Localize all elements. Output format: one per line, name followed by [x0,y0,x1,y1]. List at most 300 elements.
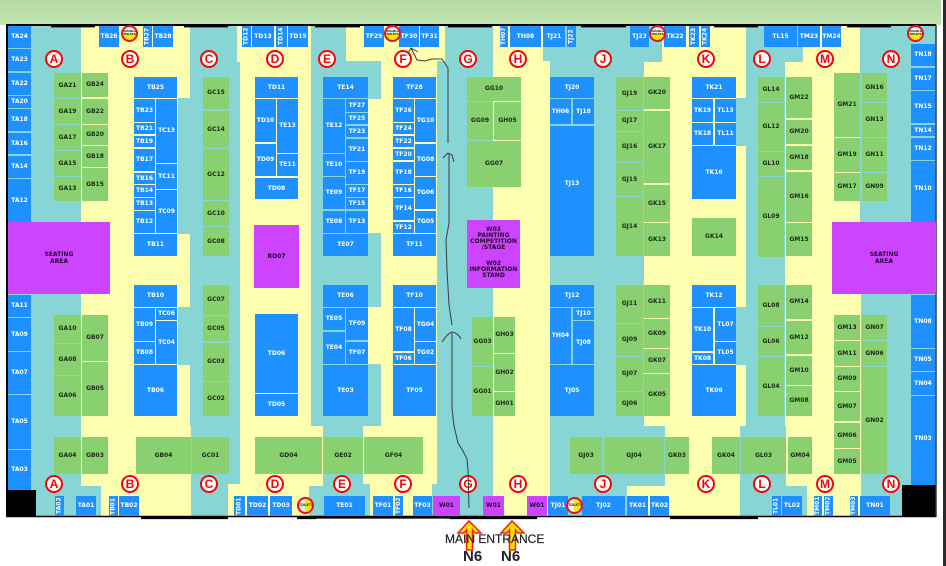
booth W03 W02 stage and information stand: INFORMATION [470,266,517,272]
zone F booths [364,26,439,474]
booth TN10 [911,161,935,222]
booth TJ22 [567,26,576,47]
marker L: L [758,52,766,66]
booth GG07 [467,141,521,187]
booth GB04: GB04 [155,452,172,458]
booth GL04 [758,357,784,416]
booth TB17: TB17 [136,156,153,163]
marker L [753,475,771,493]
booth GC01: GC01 [202,452,219,458]
booth TA11 [8,295,31,317]
booth TK19 [692,99,713,122]
booth GM04 [788,437,812,474]
booth W03 W02 stage and information stand: PAINTING [477,232,510,238]
booth GA21: GA21 [59,82,76,88]
booth GN11: GN11 [865,151,884,158]
booth GJ19: GJ19 [622,90,637,96]
booth GC07 [203,285,229,315]
booth TE03 [323,365,368,416]
booth GK04: GK04 [717,452,735,458]
booth TF25: TF25 [349,114,365,122]
booth TK24: TK24 [702,28,708,45]
booth TD10 [255,99,276,142]
marker D [266,50,284,68]
booth GB05: GB05 [86,385,104,392]
booth GJ19 [616,77,643,110]
booth GC14 [203,111,229,148]
booth TK02: TK02 [651,502,668,509]
booth TG05: TG05 [417,218,434,225]
booth TK18 [692,123,713,145]
booth TN14 [911,125,935,136]
booth GD04 [255,437,322,474]
marker G: G [463,52,473,66]
booth GB07 [82,315,108,361]
booth TF14: TF14 [395,205,412,212]
booth TA02: TA02 [56,498,62,514]
booth GL12: GL12 [762,123,780,130]
booth TA05 [8,395,31,449]
marker G [459,475,477,493]
booth TD11: TD11 [268,84,285,90]
booth TD15: TD15 [289,32,307,40]
booth TL11: TL11 [717,130,734,137]
booth GM16: GM16 [789,193,809,200]
booth TF20: TF20 [395,150,412,158]
booth GJ07 [616,357,643,391]
aisle letter markers top row [45,50,900,68]
marker N: N [887,52,895,66]
booth TE14: TE14 [337,84,354,90]
booth GN06: GN06 [865,350,884,356]
booth TJ10: TJ10 [576,310,591,317]
booth TN03: TN03 [914,434,932,442]
booth TB02: TB02 [120,502,138,509]
booth TF24 [393,123,414,134]
booth GH02: GH02 [495,368,514,376]
booth TA02 [55,496,64,516]
booth TK08 [692,353,713,364]
booth TJ23: TJ23 [632,32,647,40]
booth GB20 [82,125,108,145]
booth TF08 [393,308,414,351]
booth W03 W02 stage and information stand: /STAGE [482,244,505,250]
booth GH02 [494,354,515,391]
booth TE13: TE13 [279,122,296,129]
booth GL09 [758,177,784,257]
booth TN03 [911,396,935,485]
booth GM11: GM11 [837,350,857,356]
booth GG03: GG03 [473,338,492,344]
marker A: A [50,52,58,66]
toilet icon top F [384,25,401,42]
booth TF23 [346,126,368,137]
booth GG07: GG07 [485,160,503,167]
booth GA10 [54,315,81,343]
booth TG08: TG08 [417,156,434,163]
booth TA05: TA05 [11,418,28,425]
booth TD05: TD05 [268,401,285,408]
booth TA07: TA07 [11,369,28,376]
booth TD02: TD02 [249,502,266,509]
booth GH05 [494,102,521,140]
booth TF19 [346,162,368,184]
booth GM15: GM15 [789,236,809,242]
booth TK23 [689,26,699,47]
booth TB01: TB01 [110,498,116,515]
booth TE09: TE09 [326,189,342,196]
booth TF02: TF02 [395,498,402,514]
booth GM14: GM14 [789,298,809,305]
booth GE02 [323,437,363,474]
booth TN08: TN08 [914,318,932,324]
booth TD01: TD01 [236,497,242,515]
marker K: K [702,52,710,66]
booth TF30 [399,26,419,47]
booth TC11 [156,164,177,189]
marker F: F [399,52,407,66]
booth GA06 [54,376,81,416]
booth GM08 [786,386,812,416]
toilet icon bottom D: TOILETS [299,502,313,506]
booth TB11: TB11 [147,241,164,248]
booth TB16 [134,173,155,184]
booth GB03: GB03 [86,452,104,458]
aisle letter markers bottom row [45,475,900,493]
booth GC15: GC15 [207,89,225,96]
booth TF07 [346,342,368,364]
booth TK01 [627,496,648,516]
booth TJ22: TJ22 [568,29,574,44]
booth TG05 [415,211,436,233]
booth TB06: TB06 [147,386,164,394]
booth GM22 [786,77,812,118]
top wall booths H and J [500,26,576,47]
booth TH06: TH06 [552,108,569,114]
booth TA12: TA12 [11,196,28,204]
booth GM12: GM12 [789,334,809,340]
booth TA01: TA01 [78,502,94,509]
booth TA16: TA16 [11,140,28,146]
booth TA20: TA20 [11,98,28,105]
booth GM13: GM13 [837,324,857,330]
booth TD11 [255,77,298,98]
booth TK22: TK22 [666,32,684,40]
booth TB25 [134,77,177,98]
toilet icon bottom J [566,497,583,514]
booth TE10: TE10 [326,161,342,168]
booth TH04 [550,308,571,364]
booth GM13 [834,315,860,340]
booth TF28 [393,77,436,98]
marker A [45,50,63,68]
booth GN16 [862,73,887,102]
booth TM24 [822,26,841,47]
marker F [394,475,412,493]
booth TF27: TF27 [349,102,365,108]
zone G and H booths [467,77,521,416]
booth TC09: TC09 [158,208,175,214]
marker A: A [50,477,58,491]
booth GK14 [692,218,736,256]
booth W01 one [433,496,460,516]
booth TF09 [346,308,368,340]
booth TM24: TM24 [822,32,841,40]
booth GJ15: GJ15 [622,176,637,182]
booth TF26: TF26 [395,106,412,114]
booth TF21 [346,139,368,161]
booth TA18: TA18 [11,116,28,123]
booth TF12 [393,222,414,233]
booth W01 three: W01 [530,502,544,509]
booth TF08: TF08 [395,326,412,332]
booth TD06 [255,314,298,393]
booth TN12 [911,138,935,160]
zone K booths [664,26,736,416]
marker H: H [514,477,522,491]
booth TK06 [692,365,736,416]
booth GA15 [54,151,81,176]
booth TK01: TK01 [629,502,646,509]
booth GC10 [203,201,229,226]
booth TB26 [99,26,119,47]
booth W03 W02 stage and information stand: COMPETITION [470,238,517,244]
booth TB10: TB10 [147,292,164,299]
booth GJ11 [616,285,643,323]
booth TA12 [8,179,31,222]
booth GA19 [54,99,81,124]
seating area right: SEATING [870,250,898,258]
booth TB27: TB27 [144,28,150,45]
booth GH03 [494,317,515,353]
booth TF31 [420,26,439,47]
seating area left: SEATING [45,250,73,258]
booth TA16 [8,133,31,154]
booth GG03 [472,317,493,366]
booth TE11 [277,154,298,176]
booth TJ12: TJ12 [565,292,579,299]
booth GM21 [834,73,860,137]
booth TB06 [134,365,177,416]
booth GM05: GM05 [837,458,857,464]
booth TJ05: TJ05 [565,386,579,394]
booth GL10 [758,152,784,176]
booth GJ16: GJ16 [622,143,637,150]
booth GJ06: GJ06 [622,400,637,407]
booth TB12 [134,211,155,233]
booth TB16: TB16 [136,174,153,182]
booth TJ18 [573,99,594,124]
booth TD14: TD14 [278,28,284,45]
booth GK09: GK09 [648,330,666,336]
marker N [882,50,900,68]
marker N: N [887,477,895,491]
booth TF03 [413,496,432,516]
booth GK04 [712,437,740,474]
booth GN13: GN13 [865,116,884,123]
booth TA03 [8,450,31,490]
marker C [200,475,218,493]
booth GM06: GM06 [837,432,857,438]
zone M booths [786,26,860,474]
booth TF05 [393,365,436,416]
booth TF16 [393,185,414,197]
booth GK13 [644,223,670,256]
booth TJ21 [543,26,565,47]
booth TC04: TC04 [158,338,175,346]
booth GK15: GK15 [648,200,666,206]
booth TK16: TK16 [705,168,723,176]
marker K [697,475,715,493]
booth GK17: GK17 [648,143,666,150]
booth GM10 [786,356,812,385]
booth GB03 [82,437,108,474]
booth TL01: TL01 [772,498,780,514]
booth GM22: GM22 [789,94,809,100]
booth TK19: TK19 [694,106,711,114]
booth GL08 [758,285,784,326]
booth GK07: GK07 [648,357,666,364]
booth GJ03: GJ03 [578,452,594,458]
booth GM15 [786,223,812,256]
booth TL01 [772,496,781,516]
booth GK17 [644,111,670,183]
booth TJ23 [630,26,649,47]
booth GM20 [786,120,812,144]
booth GL08: GL08 [762,302,780,308]
booth GC12: GC12 [207,170,225,178]
marker C: C [205,477,213,491]
booth GG10 [467,77,521,101]
booth TE13 [277,99,298,153]
booth GM12 [786,321,812,354]
booth TE12: TE12 [326,122,342,129]
background: green sky band [0,0,941,25]
booth TA23: TA23 [11,56,28,63]
booth W01 two: W01 [486,502,501,509]
booth GK11 [644,285,670,318]
booth GA08 [54,344,81,375]
booth GB15: GB15 [86,180,104,188]
marker B: B [126,52,134,66]
zone L booths [758,26,820,416]
booth TD15 [288,26,308,47]
booth GB24: GB24 [86,81,104,88]
booth TE05 [323,308,345,330]
booth TF06 [393,353,414,364]
booth TK21: TK21 [705,84,723,90]
booth TB28: TB28 [154,32,172,40]
booth TF18 [393,162,414,184]
booth TB01 [109,496,118,516]
toilet icon top B [121,25,138,42]
booth GM05 [834,449,860,474]
booth TF21: TF21 [349,146,365,153]
booth GC02: GC02 [207,395,225,402]
booth TB12: TB12 [136,218,153,225]
bottom row green booths J K L [570,437,786,474]
booth GG09 [467,102,493,140]
booth TG06: TG06 [417,189,434,196]
zone B and C booths [99,26,229,474]
booth W01 two [483,496,504,516]
booth GL09: GL09 [762,213,780,220]
zone J booths [550,26,670,416]
booth GA17 [54,125,81,150]
booth GK07 [644,349,670,373]
booth GC01 [192,437,229,474]
booth GC03: GC03 [207,358,225,365]
booth TE07 [323,234,368,256]
booth GC03 [203,343,229,381]
seating area left [8,222,110,294]
booth GM06 [834,423,860,448]
booth GM08: GM08 [789,397,809,404]
booth TN17: TN17 [914,75,932,82]
booth TL05: TL05 [717,349,734,356]
booth TE03: TE03 [337,386,354,394]
booth GN13 [862,103,887,137]
booth TA22: TA22 [11,80,28,87]
booth TN01: TN01 [866,502,884,509]
booth GK11: GK11 [648,298,666,304]
booth TF27 [346,99,368,112]
toilet icon top J: DISABLED TOILETS [651,28,666,36]
booth GC15 [203,77,229,109]
booth W03 W02 stage and information stand: W02 [486,260,501,266]
bottom wall booths [55,496,890,516]
booth TL02: TL02 [784,502,800,509]
booth TB21: TB21 [136,124,153,132]
booth GK05: GK05 [648,391,666,398]
booth GC05 [203,316,229,341]
toilet icon top F: DISABLED TOILETS [386,28,401,36]
booth TC06 [156,308,177,320]
N6 label left: N6 [463,548,482,565]
booth TA01 [76,496,96,516]
booth TF13: TF13 [349,218,365,225]
booth GC12 [203,149,229,200]
booth TD13: TD13 [254,32,272,40]
booth TA14: TA14 [11,163,28,170]
booth GA13: GA13 [59,185,76,192]
booth TK12: TK12 [705,292,723,299]
booth TM23 [798,26,820,47]
booth GN16: GN16 [865,84,884,90]
booth TF01 [373,496,393,516]
booth TB09 [134,308,155,341]
booth GL10: GL10 [762,160,780,167]
booth GJ09 [616,324,643,356]
booth TK06: TK06 [705,386,723,394]
booth GL06 [758,327,784,356]
booth TL07 [715,308,736,341]
marker M: M [820,477,830,491]
booth TJ02 [582,496,625,516]
booth TE01 [324,496,365,516]
booth TB13 [134,198,155,210]
booth TH07: TH07 [500,28,507,45]
booth TL11 [715,123,736,145]
booth TE09 [323,177,345,209]
booth GB22 [82,99,108,124]
marker L [753,50,771,68]
booth TA07 [8,352,31,394]
booth GC14: GC14 [207,126,225,132]
booth TL13 [715,99,736,122]
booth GN09: GN09 [865,183,884,190]
booth TD06: TD06 [268,350,285,356]
